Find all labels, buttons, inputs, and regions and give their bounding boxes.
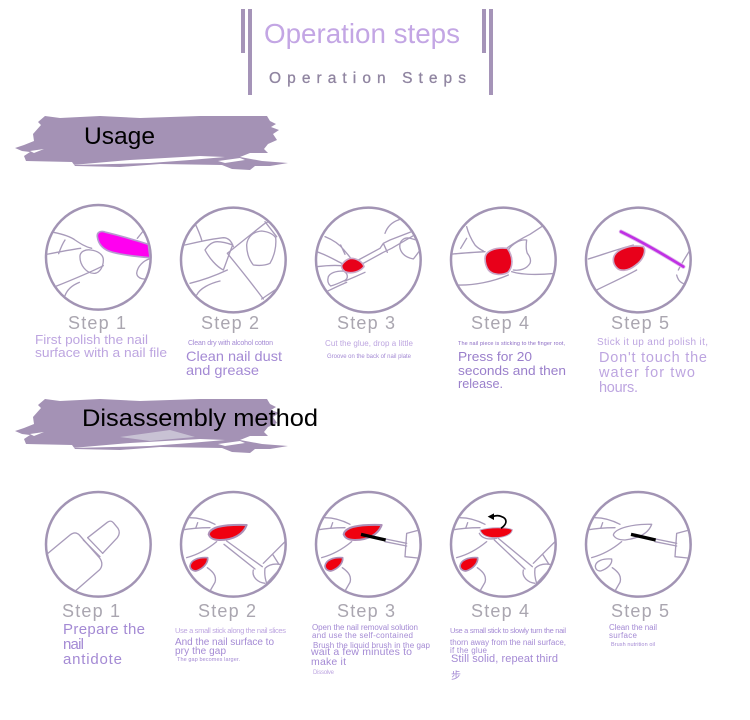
caption: disassembly step 5: Brush nutrition oil [611,642,655,648]
caption: usage step 4: seconds and then [458,363,566,378]
caption: disassembly step 5: surface [609,631,638,640]
heading: disassembly method [15,399,318,453]
caption: disassembly step 1: Step 1 [62,601,120,621]
title block: Operation steps [264,18,460,49]
caption: usage step 4 [458,313,566,391]
caption: usage step 1: First polish the nail [35,332,148,347]
caption: usage step 3: Groove on the back of nail plate [327,354,412,360]
caption: disassembly step 2: Use a small stick along the nail slices [175,626,286,635]
caption: usage step 1: Step 1 [68,313,126,333]
caption: disassembly step 5: Clean the nail [609,623,657,632]
title block: Operation Steps [269,70,466,87]
illustration: polishing nail with file [43,205,152,310]
disassembly step captions [62,601,669,682]
illustration: prying with a stick [180,492,287,597]
caption: disassembly step 3: and use the self-contained [312,631,413,640]
caption: usage step 2: Step 2 [201,313,259,333]
usage step captions [35,313,708,396]
caption: disassembly step 1: antidote [63,651,122,668]
caption: disassembly step 4: 步 [451,670,461,682]
caption: disassembly step 2 [175,601,286,663]
caption: disassembly step 1: nail [63,636,84,653]
heading: disassembly method: Disassembly method [82,405,318,432]
caption: disassembly step 2: The gap becomes larger. [177,657,240,663]
caption: disassembly step 4: if the glue [450,646,488,655]
illustration: cleaning nail with cotton [181,208,287,312]
caption: usage step 5: Stick it up and polish it, [597,337,708,348]
caption: disassembly step 4: Still solid, repeat third [451,653,558,665]
caption: disassembly step 3 [310,601,431,676]
caption: usage step 3: Step 3 [337,313,395,333]
caption: disassembly step 1: Prepare the [63,621,145,638]
caption: disassembly step 3: make it [311,656,346,668]
illustration: turning the nail off [450,492,557,597]
caption: disassembly step 3: Dissolve [313,670,335,676]
caption: usage step 4: release. [458,376,503,391]
disassembly steps 3, 4 and 5 [315,492,691,597]
illustration: polishing applied nail [586,208,692,312]
disassembly steps 1 and 2 [46,492,287,597]
caption: disassembly step 2: pry the gap [175,646,226,657]
caption: usage step 4: The nail piece is sticking to the finger root, [458,341,565,347]
caption: usage step 5 [597,313,708,396]
caption: usage step 5: water for two [598,365,695,381]
caption: usage step 4: Step 4 [471,313,529,333]
caption: disassembly step 3: Open the nail removal solution [312,623,418,632]
illustration: pressing nail [450,208,557,312]
illustration: applying glue [316,208,425,312]
title block [241,9,493,95]
caption: disassembly step 1 [62,601,145,668]
caption: disassembly step 2: And the nail surface to [175,637,274,648]
caption: disassembly step 3: Brush the liquid brush in the gap [313,641,431,650]
caption: usage step 1: surface with a nail file [35,345,167,360]
caption: usage step 4: Press for 20 [458,349,532,364]
heading: usage [15,116,288,170]
caption: disassembly step 4: thorn away from the nail surface, [450,638,566,647]
caption: disassembly step 4 [450,601,566,682]
caption: disassembly step 3: wait a few minutes to [310,646,412,658]
caption: usage step 5: hours. [599,380,638,396]
caption: disassembly step 2: Step 2 [198,601,256,621]
heading: usage: Usage [84,123,155,150]
caption: disassembly step 4: Step 4 [471,601,529,621]
caption: usage step 5: Step 5 [611,313,669,333]
caption: usage step 3: Cut the glue, drop a little [325,339,414,348]
illustration: cleaning nail surface [585,492,691,597]
caption: usage step 1 [35,313,167,360]
icon: curved arrow [488,513,506,528]
caption: disassembly step 4: Use a small stick to slowly turn the nail [450,626,566,635]
caption: usage step 2: and grease [186,362,259,378]
caption: usage step 5: Don't touch the [599,350,707,366]
caption: usage step 2: Clean dry with alcohol cotton [188,340,273,347]
caption: usage step 2 [186,313,282,378]
caption: usage step 2: Clean nail dust [186,348,282,364]
illustration: brushing removal liquid [315,492,421,597]
caption: disassembly step 5 [609,601,669,648]
caption: usage step 3 [325,313,414,360]
illustration: nail antidote bottle [46,492,151,597]
caption: disassembly step 3: Step 3 [337,601,395,621]
usage steps 1 and 2 [43,205,287,312]
usage steps 3, 4 and 5 [316,208,692,312]
caption: disassembly step 5: Step 5 [611,601,669,621]
